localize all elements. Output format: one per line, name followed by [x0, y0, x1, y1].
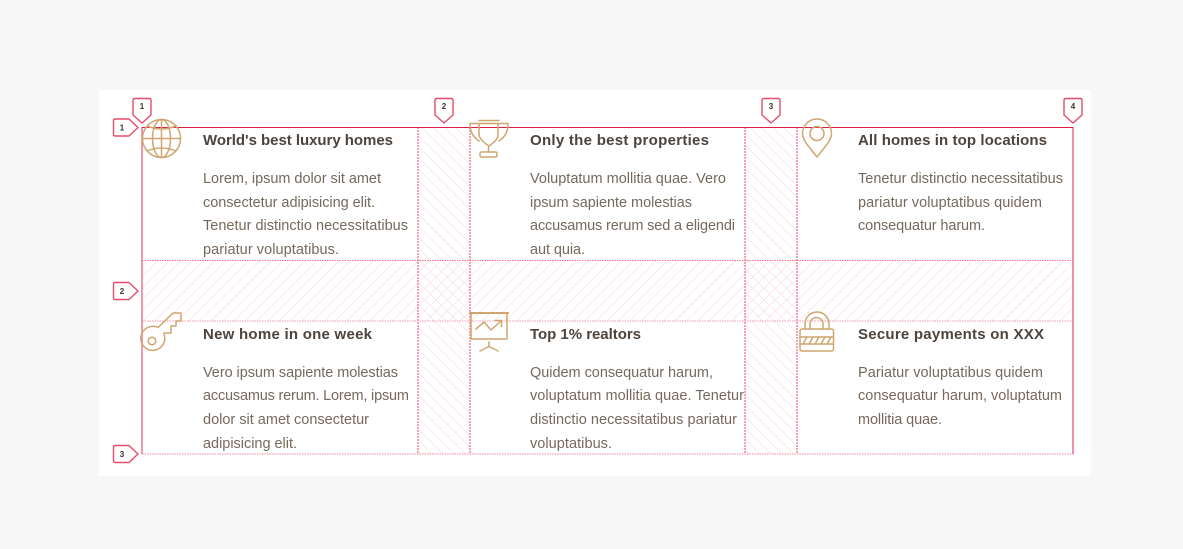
- card: one week: [141, 313, 409, 452]
- body text: adipisicing elit.: [203, 436, 297, 452]
- icon: key: [141, 313, 181, 350]
- row gap hatch: [142, 261, 1073, 321]
- column marker 3: 3: [769, 102, 774, 111]
- column marker 4: 4: [1071, 102, 1076, 111]
- heading: World's best luxury homes: [203, 132, 393, 149]
- body text: Tenetur distinctio necessitatibus: [858, 171, 1063, 187]
- heading: Top 1% realtors: [530, 326, 641, 343]
- column gap 2 hatch: [745, 127, 797, 454]
- body text: pariatur voluptatibus.: [203, 242, 339, 258]
- column marker 2: [435, 98, 453, 123]
- column marker 1: [133, 98, 151, 123]
- body text: [203, 365, 409, 452]
- card: best properties: [470, 120, 735, 258]
- icon: presentation board: [470, 313, 508, 351]
- row marker 3: 3: [120, 450, 125, 459]
- column gap 1 hatch: [418, 127, 470, 454]
- body text: consectetur adipisicing elit.: [203, 195, 375, 211]
- column marker 1: 1: [140, 102, 145, 111]
- body text: distinctio necessitatibus pariatur: [530, 412, 737, 428]
- body text: [858, 365, 1062, 428]
- body text: mollitia quae.: [858, 412, 942, 428]
- card: luxury homes: [142, 120, 408, 258]
- heading: New home in one week: [203, 326, 373, 343]
- column marker 3: [762, 98, 780, 123]
- heading: Only the best properties: [530, 132, 709, 149]
- heading: Secure payments on XXX: [858, 326, 1044, 343]
- icon: map pin: [802, 119, 832, 157]
- grid overlay: [142, 127, 1073, 454]
- column marker 4: [1064, 98, 1082, 123]
- row marker 1: [114, 119, 138, 136]
- body text: accusamus rerum sed a eligendi: [530, 218, 735, 234]
- card: top locations: [802, 119, 1063, 234]
- body text: [858, 171, 1063, 234]
- body text: Voluptatum mollitia quae. Vero: [530, 171, 726, 187]
- heading: All homes in top locations: [858, 132, 1047, 149]
- icon: trophy: [470, 120, 508, 157]
- card: realtors: [470, 313, 744, 452]
- body text: pariatur voluptatibus quidem: [858, 195, 1042, 211]
- body text: dolor sit amet consectetur: [203, 412, 369, 428]
- icon: padlock: [800, 312, 834, 351]
- icon: globe: [142, 120, 180, 158]
- row marker 3: [114, 446, 138, 462]
- row marker 2: 2: [120, 287, 125, 296]
- white panel: [99, 90, 1091, 476]
- body text: aut quia.: [530, 242, 585, 258]
- card: secure payments: [800, 312, 1062, 428]
- body text: Tenetur distinctio necessitatibus: [203, 218, 408, 234]
- row marker 1: 1: [120, 124, 125, 132]
- body text: Quidem consequatur harum,: [530, 365, 713, 381]
- body text: consequatur harum, voluptatum: [858, 388, 1062, 404]
- body text: [530, 171, 735, 258]
- body text: voluptatibus.: [530, 436, 612, 452]
- column marker 2: 2: [442, 102, 447, 111]
- row marker 2: [114, 282, 138, 300]
- body text: accusamus rerum. Lorem, ipsum: [203, 388, 409, 404]
- body text: [530, 365, 744, 452]
- body text: [203, 171, 408, 258]
- body text: Vero ipsum sapiente molestias: [203, 365, 398, 381]
- body text: voluptatum mollitia quae. Tenetur: [530, 388, 744, 404]
- body text: Lorem, ipsum dolor sit amet: [203, 171, 381, 187]
- body text: Pariatur voluptatibus quidem: [858, 365, 1043, 381]
- body text: consequatur harum.: [858, 218, 985, 234]
- body text: ipsum sapiente molestias: [530, 195, 692, 211]
